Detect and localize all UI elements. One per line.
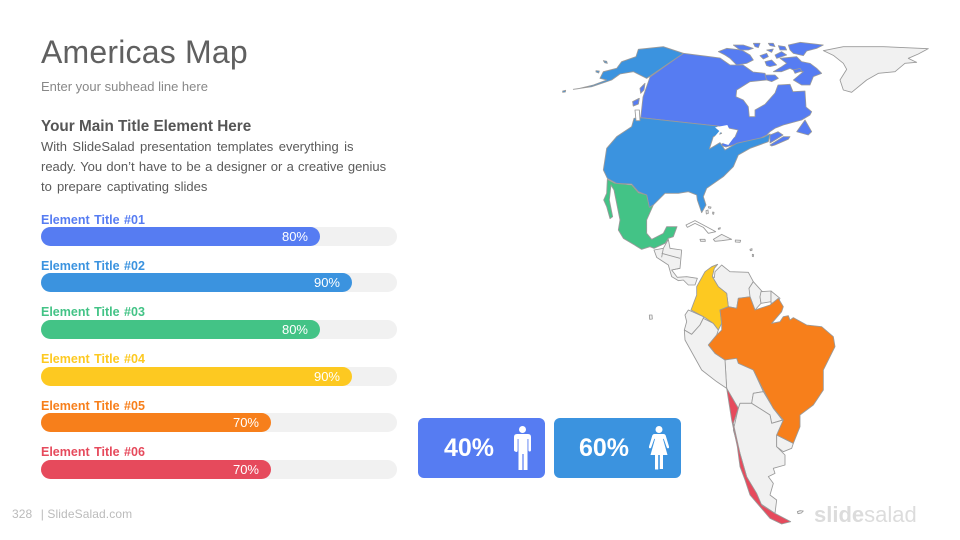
Ecuador [684,310,703,334]
label: element 1: Element Title #01 [41,213,145,227]
bar: element 5, 70% [41,413,397,432]
bar: element 1, 80% [41,227,397,246]
Suriname [760,291,771,303]
logo: slidesalad: slidesalad [814,502,917,527]
Pacific coast islands [633,83,645,106]
Paraguay [752,392,782,423]
stat card: female 60% [554,418,681,478]
Peru [684,318,727,388]
Greenland [823,47,928,92]
body text: to prepare captivating slides [41,179,207,194]
stat card: male 40% [418,418,545,478]
icon: man [514,426,531,470]
Northern South America [684,264,835,443]
Central American borders [662,248,680,270]
title: Americas Map [41,34,248,70]
icon: woman [648,426,670,470]
bar: element 6, 70% [41,460,397,479]
label: element 2: Element Title #02 [41,259,145,273]
stat card: male 40%: 40% [444,434,494,462]
main title: Your Main Title Element Here [41,118,251,135]
label: element 6: Element Title #06 [41,445,145,459]
label: element 3: Element Title #03 [41,305,145,319]
body text [41,139,386,194]
bar: element 4, 90% [41,367,397,386]
French Guiana [771,291,780,303]
label: element 5: Element Title #05 [41,399,145,413]
Brazil [708,297,835,443]
bar: element 3, 80% [41,320,397,339]
Great Lakes [711,125,735,147]
Alaska islands [563,61,607,92]
Venezuela [712,265,753,308]
bar: element 3, 80%: 80% [282,322,308,337]
Lower 48 USA [603,118,770,213]
Uruguay [777,435,793,452]
body text: ready. You don’t have to be a designer or a creative genius [41,159,386,174]
Caribbean islands [649,207,754,319]
stat card: female 60%: 60% [579,434,629,462]
Central America [654,239,697,285]
footer: page number and site: 328 | SlideSalad.com [12,507,132,521]
North America group [563,47,928,249]
bar: element 4, 90%: 90% [314,369,340,384]
bar: element 1, 80%: 80% [282,229,308,244]
bar: element 2, 90% [41,273,397,292]
Guyana [749,282,762,310]
bar: element 6, 70%: 70% [233,462,259,477]
Vancouver Island [635,110,640,121]
Bolivia [725,357,763,408]
Argentina [733,403,785,513]
body text: With SlideSalad presentation templates everything is [41,139,354,154]
Chile [727,388,791,524]
Canadian Arctic islands [718,42,823,85]
Southern South America [725,357,803,524]
Central America and Caribbean [649,207,754,319]
bar: element 5, 70%: 70% [233,415,259,430]
subhead: Enter your subhead line here [41,79,208,94]
Colombia [691,264,728,330]
bar: element 2, 90%: 90% [314,275,340,290]
Alaska [573,47,683,89]
label: element 4: Element Title #04 [41,352,145,366]
Falkland Islands [797,511,803,514]
Mexico [604,179,677,249]
Canada mainland and Maritimes [633,53,812,147]
